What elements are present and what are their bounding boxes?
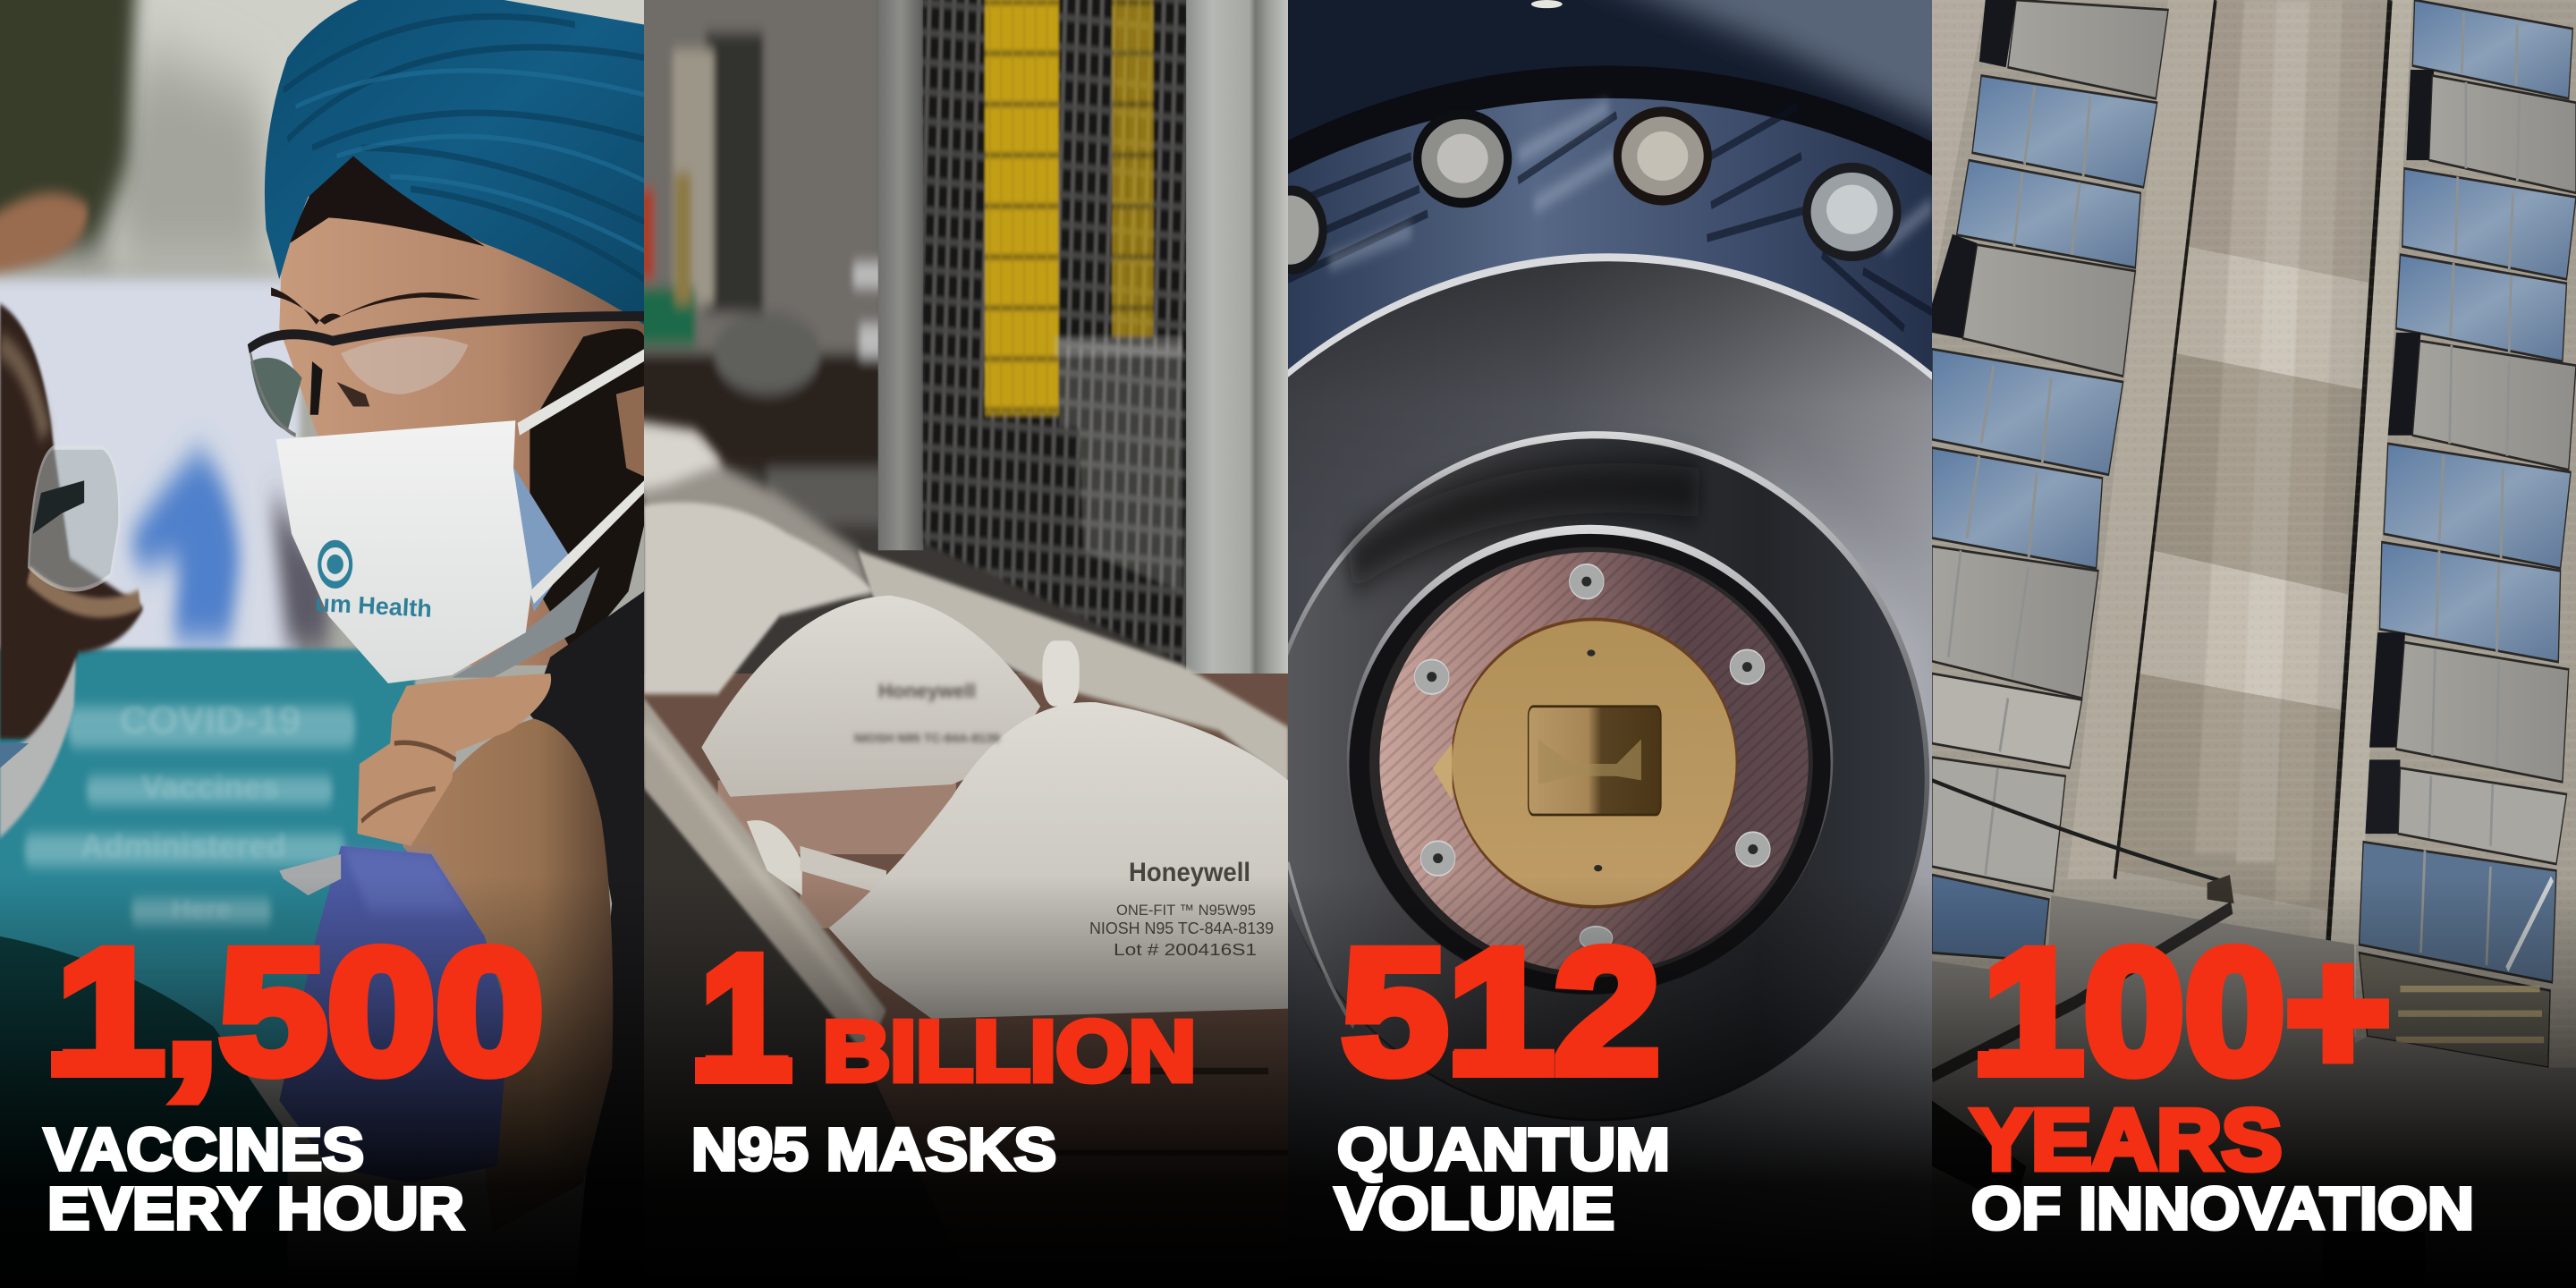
near rail [644, 780, 972, 1288]
inner bezel [1347, 525, 1833, 995]
dark outer ring [869, 65, 2348, 1288]
conveyor belt [644, 674, 1288, 1288]
icon: bolts [1258, 106, 1902, 275]
side rail [858, 550, 1288, 784]
dark gradient [1288, 0, 1932, 1288]
safety mesh [923, 0, 1186, 665]
photo: quantum computer chip mount [869, 0, 2348, 1288]
label: vaccines every hour: EVERY HOUR [47, 1175, 464, 1242]
photo: healthcare worker receiving a vaccine [0, 0, 644, 1218]
base wall [1932, 895, 2576, 1288]
face [279, 206, 644, 665]
label: vaccines every hour: VACCINES [44, 1116, 364, 1183]
machine frame [878, 0, 923, 550]
front mask print: Lot # 200416S1 [1114, 941, 1257, 959]
right windows [2360, 0, 2576, 1068]
qubit chip [1529, 707, 1661, 815]
label: quantum volume: VOLUME [1335, 1175, 1614, 1242]
stone column [1932, 0, 2576, 1288]
blurred sign lettering [80, 699, 301, 924]
front mask print: NIOSH N95 TC-84A-8139 [1089, 919, 1274, 937]
shirt [530, 591, 644, 1200]
left windows [1932, 0, 2168, 961]
icon: face mask [276, 349, 644, 683]
glove [279, 846, 509, 1182]
front mask print: Honeywell [1129, 858, 1250, 887]
mask logo text: um Health [315, 589, 433, 623]
panel: N95 masks [644, 0, 1288, 1182]
stat: 1,500: 1,500 [56, 912, 544, 1110]
dark gradient [0, 0, 644, 1288]
window mullions [1948, 13, 2520, 965]
arm [402, 719, 613, 1232]
stat unit: years: YEARS [1971, 1092, 2282, 1188]
photo: art deco building facade [1932, 0, 2576, 1288]
panel: years of innovation [1932, 0, 2576, 1288]
stat: 100+: 100+ [1983, 912, 2391, 1110]
icon: turban [265, 0, 644, 325]
mid mask print [854, 680, 1000, 745]
stat: 1 billion [695, 919, 1196, 1116]
left soft masks and rail [636, 423, 874, 599]
label: of innovation: OF INNOVATION [1971, 1175, 2474, 1242]
stat: 1 billion: 1 [700, 919, 788, 1116]
front mask print [1089, 858, 1274, 959]
blurred sign lettering: COVID-19 [120, 699, 301, 742]
panel: quantum volume [869, 0, 2348, 1288]
bolt plate [890, 98, 2327, 1288]
hand [358, 674, 551, 846]
label: vaccines every hour [44, 1116, 464, 1242]
electric wire [1932, 780, 2219, 880]
icon: glasses [249, 317, 644, 436]
stepped ring [1263, 431, 1929, 1121]
label: quantum volume: QUANTUM [1337, 1116, 1670, 1183]
stat: 512: 512 [1342, 912, 1660, 1110]
mid mask print: Honeywell [878, 680, 976, 702]
icon: screws [1414, 564, 1770, 950]
blurred sign lettering: Administered [80, 827, 286, 864]
blurred sign lettering: Vaccines [141, 768, 279, 805]
stat: 1 billion: BILLION [823, 1004, 1196, 1099]
mid mask print: NIOSH N95 TC-84A-8139 [854, 731, 1000, 745]
polished disc [1066, 253, 2150, 1288]
label: N95 masks: N95 MASKS [691, 1116, 1056, 1183]
label: quantum volume [1335, 1116, 1670, 1242]
front mask print: ONE-FIT ™ N95W95 [1116, 902, 1256, 919]
panel: vaccines [0, 0, 644, 1231]
dark gradient [644, 0, 1288, 1288]
dark gradient [1932, 0, 2576, 1288]
gold chip carrier [1452, 619, 1736, 907]
photo: masks on a conveyor [628, 0, 1288, 1288]
blurred sign lettering: Here [172, 894, 231, 924]
copper plate [1379, 552, 1809, 972]
